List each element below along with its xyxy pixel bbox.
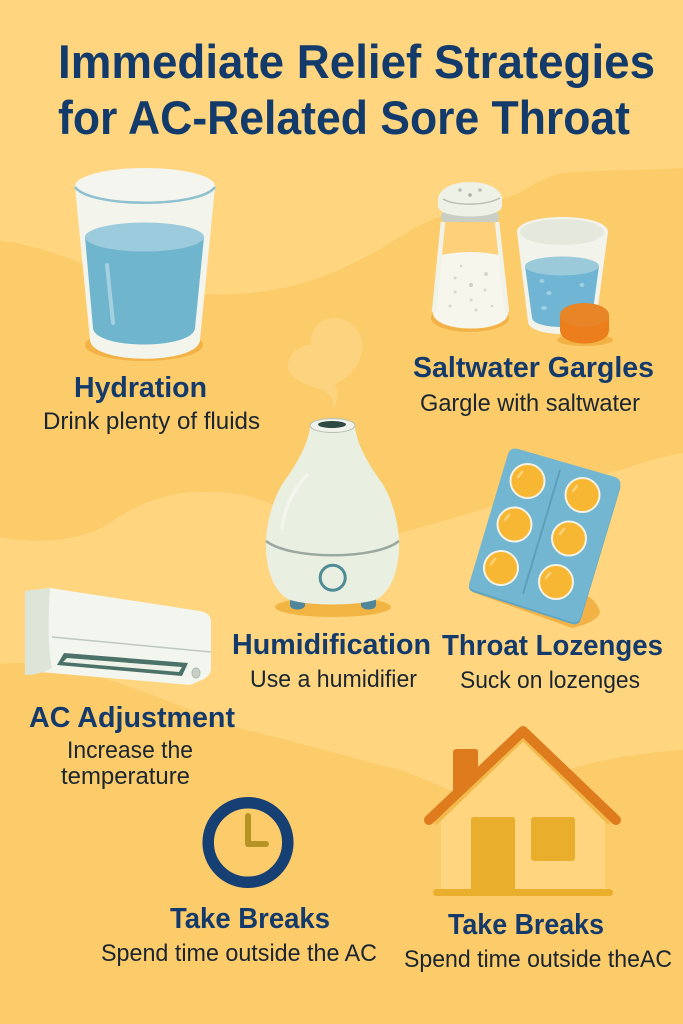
text: Gargle with saltwater: Gargle with saltwater	[420, 390, 640, 417]
text: Suck on lozenges: Suck on lozenges	[460, 667, 640, 694]
text: Increase the temperature	[61, 737, 193, 790]
icon: saltwater cup and lozenge	[517, 217, 613, 346]
icon: air conditioner	[25, 588, 211, 685]
heading: Throat Lozenges: Throat Lozenges	[442, 630, 663, 662]
heading: Take Breaks (clock): Take Breaks	[170, 903, 330, 935]
text: Drink plenty of fluids: Drink plenty of fluids	[43, 408, 260, 435]
icon: clock	[208, 803, 288, 882]
text: Spend time outside the AC: Spend time outside the AC	[101, 940, 377, 967]
heading: Take Breaks (house): Take Breaks	[448, 909, 604, 941]
icon: lozenge blister pack	[469, 449, 620, 628]
heading: Hydration: Hydration	[74, 372, 207, 404]
text: Use a humidifier: Use a humidifier	[250, 666, 417, 693]
text: Increase the temperature: Increase the	[67, 737, 193, 764]
title	[58, 35, 655, 144]
text: Increase the temperature: temperature	[61, 763, 190, 790]
title: for AC-Related Sore Throat	[58, 91, 630, 144]
text: Spend time outside theAC: Spend time outside theAC	[404, 946, 672, 973]
icon: glass of water	[75, 168, 215, 361]
icon: humidifier with steam	[266, 318, 399, 617]
icon: house	[429, 731, 616, 896]
heading: Saltwater Gargles: Saltwater Gargles	[413, 352, 654, 384]
title: Immediate Relief Strategies	[58, 35, 655, 88]
heading: Humidification: Humidification	[232, 629, 431, 661]
icon: salt shaker	[431, 182, 509, 332]
heading: AC Adjustment: AC Adjustment	[29, 702, 235, 734]
